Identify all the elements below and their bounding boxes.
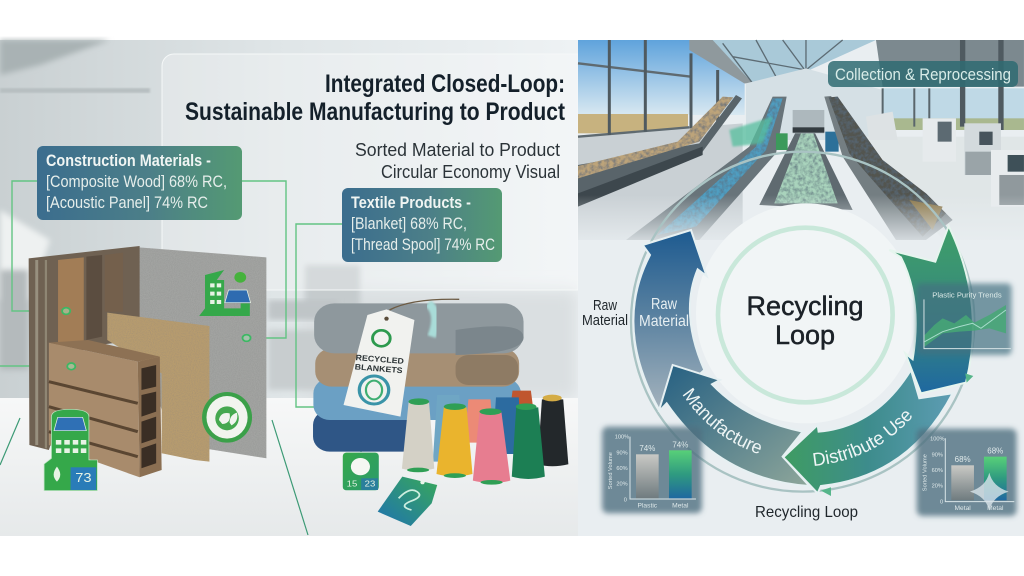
conveyor belts (578, 95, 953, 240)
cork panel (107, 313, 209, 462)
chart: plastic purity trends (917, 283, 1012, 355)
recycling loop caption: Recycling Loop (755, 504, 858, 521)
arrow: distribute use (783, 370, 953, 493)
wood and stone samples (29, 246, 365, 491)
chart: sorted volume plastic metal: 74% (672, 440, 688, 449)
bottom fade (578, 195, 1024, 250)
chart: sorted volume plastic metal: Metal (672, 502, 689, 509)
chart: plastic purity trends: Plastic Purity Trends (932, 290, 1002, 299)
recycling loop diagram (598, 150, 1020, 520)
callout: textile products: [Blanket] 68% RC, (351, 214, 467, 233)
chart: sorted volume plastic metal: Sorted Volume (608, 452, 614, 489)
chart: sorted volume metal: 60% (932, 468, 943, 474)
arrow: raw material (633, 230, 707, 410)
chart: sorted volume plastic metal (602, 427, 702, 513)
title: Integrated Closed-Loop: (325, 70, 565, 98)
icon: green recycled tag (378, 477, 437, 526)
center heading: Recycling (746, 291, 864, 321)
raw material inner label: Material (639, 313, 689, 330)
chart: sorted volume plastic metal: 74% (639, 444, 655, 453)
callout: construction materials (37, 146, 242, 220)
icon: cotton certification: 23 (365, 479, 375, 489)
chart: sorted volume plastic metal: 90% (616, 450, 628, 456)
panel: collection and reprocessing photo (578, 40, 1024, 536)
icon: sparkle (970, 473, 1009, 511)
thread spools (402, 391, 568, 485)
chart: sorted volume metal: Metal (987, 505, 1004, 512)
construction and textile leader lines (0, 181, 361, 452)
arrow tips on outer ring (821, 373, 973, 496)
chart: sorted volume plastic metal: 60% (616, 466, 628, 472)
chart: sorted volume metal: 20% (932, 484, 943, 490)
textile products (313, 299, 568, 526)
panel: sustainable products (0, 40, 578, 536)
icon: certified sustainable badge (202, 392, 252, 443)
chart: sorted volume plastic metal: 0 (624, 497, 627, 503)
chart: sorted volume metal: Metal (954, 505, 971, 512)
recycled blankets hang tag: BLANKETS (354, 362, 403, 375)
outer ring (631, 152, 974, 492)
factory background (0, 40, 578, 536)
chart: sorted volume metal: 68% (955, 455, 971, 464)
chart: sorted volume metal: Sorted Volume (923, 454, 929, 491)
chart: sorted volume metal (917, 429, 1017, 516)
title: Sustainable Manufacturing to Product (185, 98, 566, 126)
folded blankets (313, 303, 524, 452)
chart: sorted volume metal: 100% (930, 437, 945, 443)
subtitle: Circular Economy Visual (381, 162, 560, 182)
subtitle (355, 140, 560, 182)
raw material outer label (582, 297, 628, 329)
icon: cotton certification (343, 453, 379, 490)
factory windows and roof (578, 40, 1024, 240)
recycled blankets hang tag: RECYCLED (355, 352, 404, 366)
centre disk (696, 203, 916, 423)
chart: sorted volume metal: 90% (932, 452, 943, 458)
icon: solar building certification: 73 (75, 470, 92, 485)
recycled blankets hang tag (344, 299, 459, 417)
center heading (746, 291, 864, 350)
glass title panel (162, 54, 578, 290)
arc label: manufacture: Manufacture (682, 388, 761, 454)
robotic machines (866, 112, 1024, 207)
collection and reprocessing label: Collection & Reprocessing (835, 66, 1011, 84)
icon: solar building certification (44, 409, 97, 491)
chart: sorted volume plastic metal: Plastic (638, 502, 658, 509)
callout: textile products: Textile Products - (351, 193, 471, 212)
stone panel (139, 247, 266, 458)
callout: construction materials: Construction Materials - (46, 151, 211, 170)
arrow: green to blue return (889, 226, 973, 393)
chart: sorted volume metal: 68% (987, 446, 1003, 455)
raw material outer label: Material (582, 312, 628, 329)
icon: green building with solar panel (199, 270, 251, 316)
chart: sorted volume metal: 0 (940, 499, 943, 505)
chart: sorted volume plastic metal: 20% (616, 482, 628, 488)
callout: textile products: [Thread Spool] 74% RC (351, 235, 495, 254)
raw material inner label: Raw (651, 296, 677, 313)
subtitle: Sorted Material to Product (355, 140, 560, 160)
collection and reprocessing label (828, 61, 1018, 87)
callout: construction materials: [Acoustic Panel] 74% RC (46, 193, 208, 212)
center heading: Loop (775, 320, 835, 350)
chart: sorted volume plastic metal: 100% (615, 435, 629, 441)
raw material outer label: Raw (593, 297, 617, 314)
callout: textile products (342, 188, 502, 262)
arc label: distribute use: Distribute Use (813, 411, 912, 466)
arrow: manufacture (659, 365, 809, 486)
icon: cotton certification: 15 (347, 479, 357, 489)
slatted decking (49, 340, 162, 477)
wood slat wall (29, 246, 140, 450)
raw material inner label (639, 296, 689, 330)
callout: construction materials: [Composite Wood] 68% RC, (46, 172, 227, 191)
title (185, 70, 566, 126)
callout markers (62, 308, 365, 436)
